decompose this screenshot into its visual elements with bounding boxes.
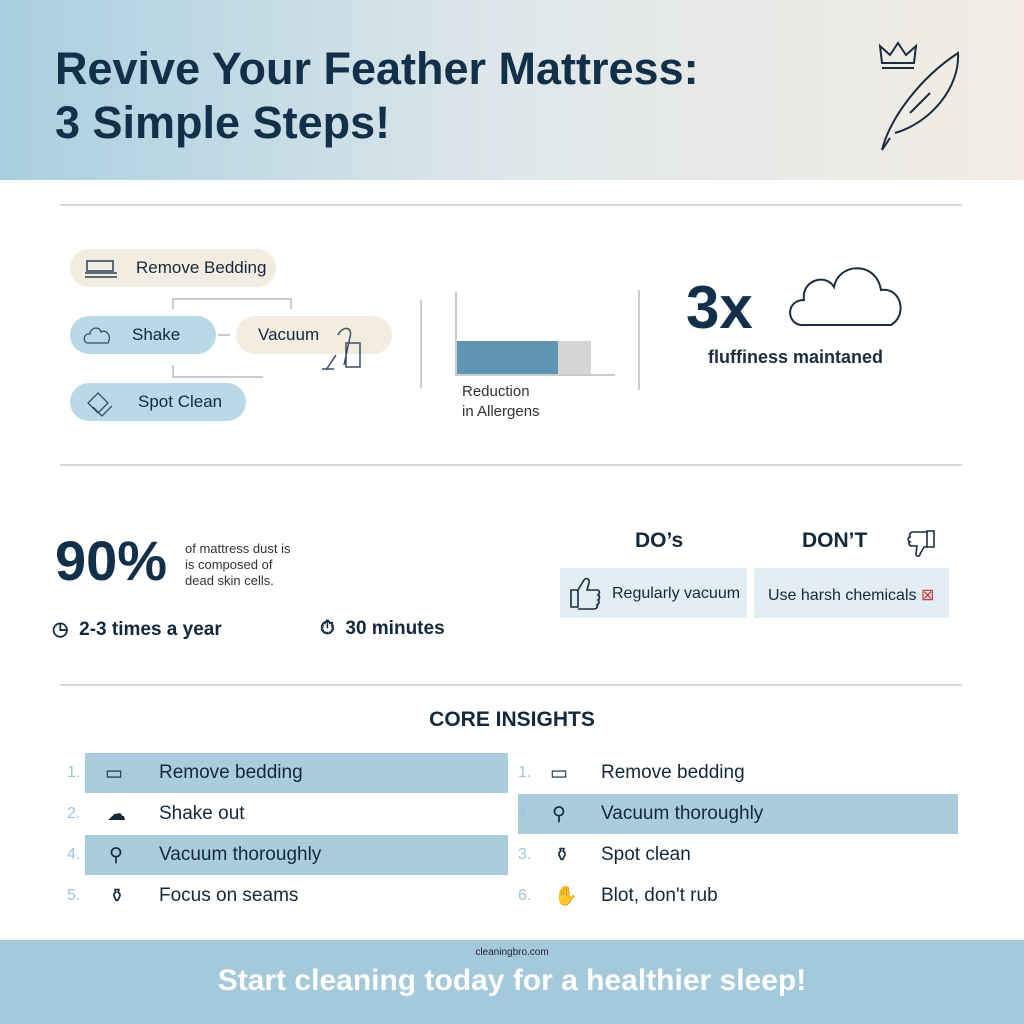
header band <box>0 0 1024 180</box>
insights list left: 4. <box>67 846 80 863</box>
flow diagram <box>70 249 392 421</box>
do's and don'ts <box>560 529 949 618</box>
step: remove bedding: Remove Bedding <box>136 258 266 277</box>
insights list right: Blot, don't rub <box>601 885 718 906</box>
frequency: ◷ 2-3 times a year <box>52 619 222 640</box>
bar chart: allergens: in Allergens <box>462 403 540 420</box>
insights list right: ⚱ <box>554 844 570 866</box>
arrows <box>172 298 292 378</box>
duration: ⏱ 30 minutes <box>320 618 445 639</box>
stat: 3x fluffiness <box>686 267 902 367</box>
do's and don'ts: DO’s <box>635 529 683 552</box>
footer: cleaningbro.com <box>475 947 549 958</box>
insights list right: Spot clean <box>601 844 691 865</box>
title: 3 Simple Steps! <box>55 97 390 148</box>
footer: Start cleaning today for a healthier sleep! <box>218 964 806 997</box>
insights list left: Vacuum thoroughly <box>159 844 321 865</box>
title <box>55 43 699 148</box>
insights list left: Remove bedding <box>159 762 303 783</box>
insights list right: 4. <box>518 805 531 822</box>
insights list left: ☁ <box>107 804 126 824</box>
stat: 90% <box>55 529 290 592</box>
insights list right: ✋ <box>554 886 578 907</box>
do's and don'ts: DON’T <box>802 529 867 552</box>
insights list left: ⚱ <box>109 886 125 906</box>
insights list left: 5. <box>67 887 80 904</box>
insights list right: 1. <box>518 764 531 781</box>
insights list left: Focus on seams <box>159 885 298 906</box>
insights list left: 1. <box>67 764 80 781</box>
step: remove bedding <box>70 249 276 287</box>
stat: 90%: is composed of <box>185 557 272 572</box>
insights list right: 3. <box>518 846 531 863</box>
insights list left: 2. <box>67 805 80 822</box>
insights list right: 6. <box>518 887 531 904</box>
core insights heading: CORE INSIGHTS <box>429 708 595 731</box>
stat: 3x fluffiness: fluffiness maintaned <box>708 347 883 367</box>
insights list left: ⚲ <box>109 844 123 866</box>
insights list right: ⚲ <box>552 804 566 824</box>
step: vacuum: Vacuum <box>258 325 319 344</box>
bar chart: allergens <box>455 292 615 420</box>
do's and don'ts: Regularly vacuum <box>612 585 740 602</box>
step: spot clean: Spot Clean <box>138 392 222 411</box>
do's and don'ts: Use harsh chemicals ⊠ <box>768 587 934 604</box>
insights list right <box>518 762 958 907</box>
stat: 90%: 90% <box>55 529 167 592</box>
insights list right: Remove bedding <box>601 762 745 783</box>
insights list right: ▭ <box>550 762 568 784</box>
stat: 90%: dead skin cells. <box>185 573 274 588</box>
insights list left: Shake out <box>159 803 245 824</box>
insights list left: ▭ <box>105 762 123 784</box>
title: Revive Your Feather Mattress: <box>55 43 699 94</box>
stat: 3x fluffiness: 3x <box>686 274 753 341</box>
step: spot clean <box>70 383 246 421</box>
footer <box>0 940 1024 1024</box>
insights list right: Vacuum thoroughly <box>601 803 763 824</box>
bar chart: allergens: Reduction <box>462 383 530 400</box>
icon: crown feather <box>878 41 960 150</box>
step: vacuum <box>236 316 392 354</box>
step: shake <box>70 316 216 354</box>
insights list left <box>67 753 508 906</box>
step: shake: Shake <box>132 325 180 344</box>
stat: 90%: of mattress dust is <box>185 541 290 556</box>
